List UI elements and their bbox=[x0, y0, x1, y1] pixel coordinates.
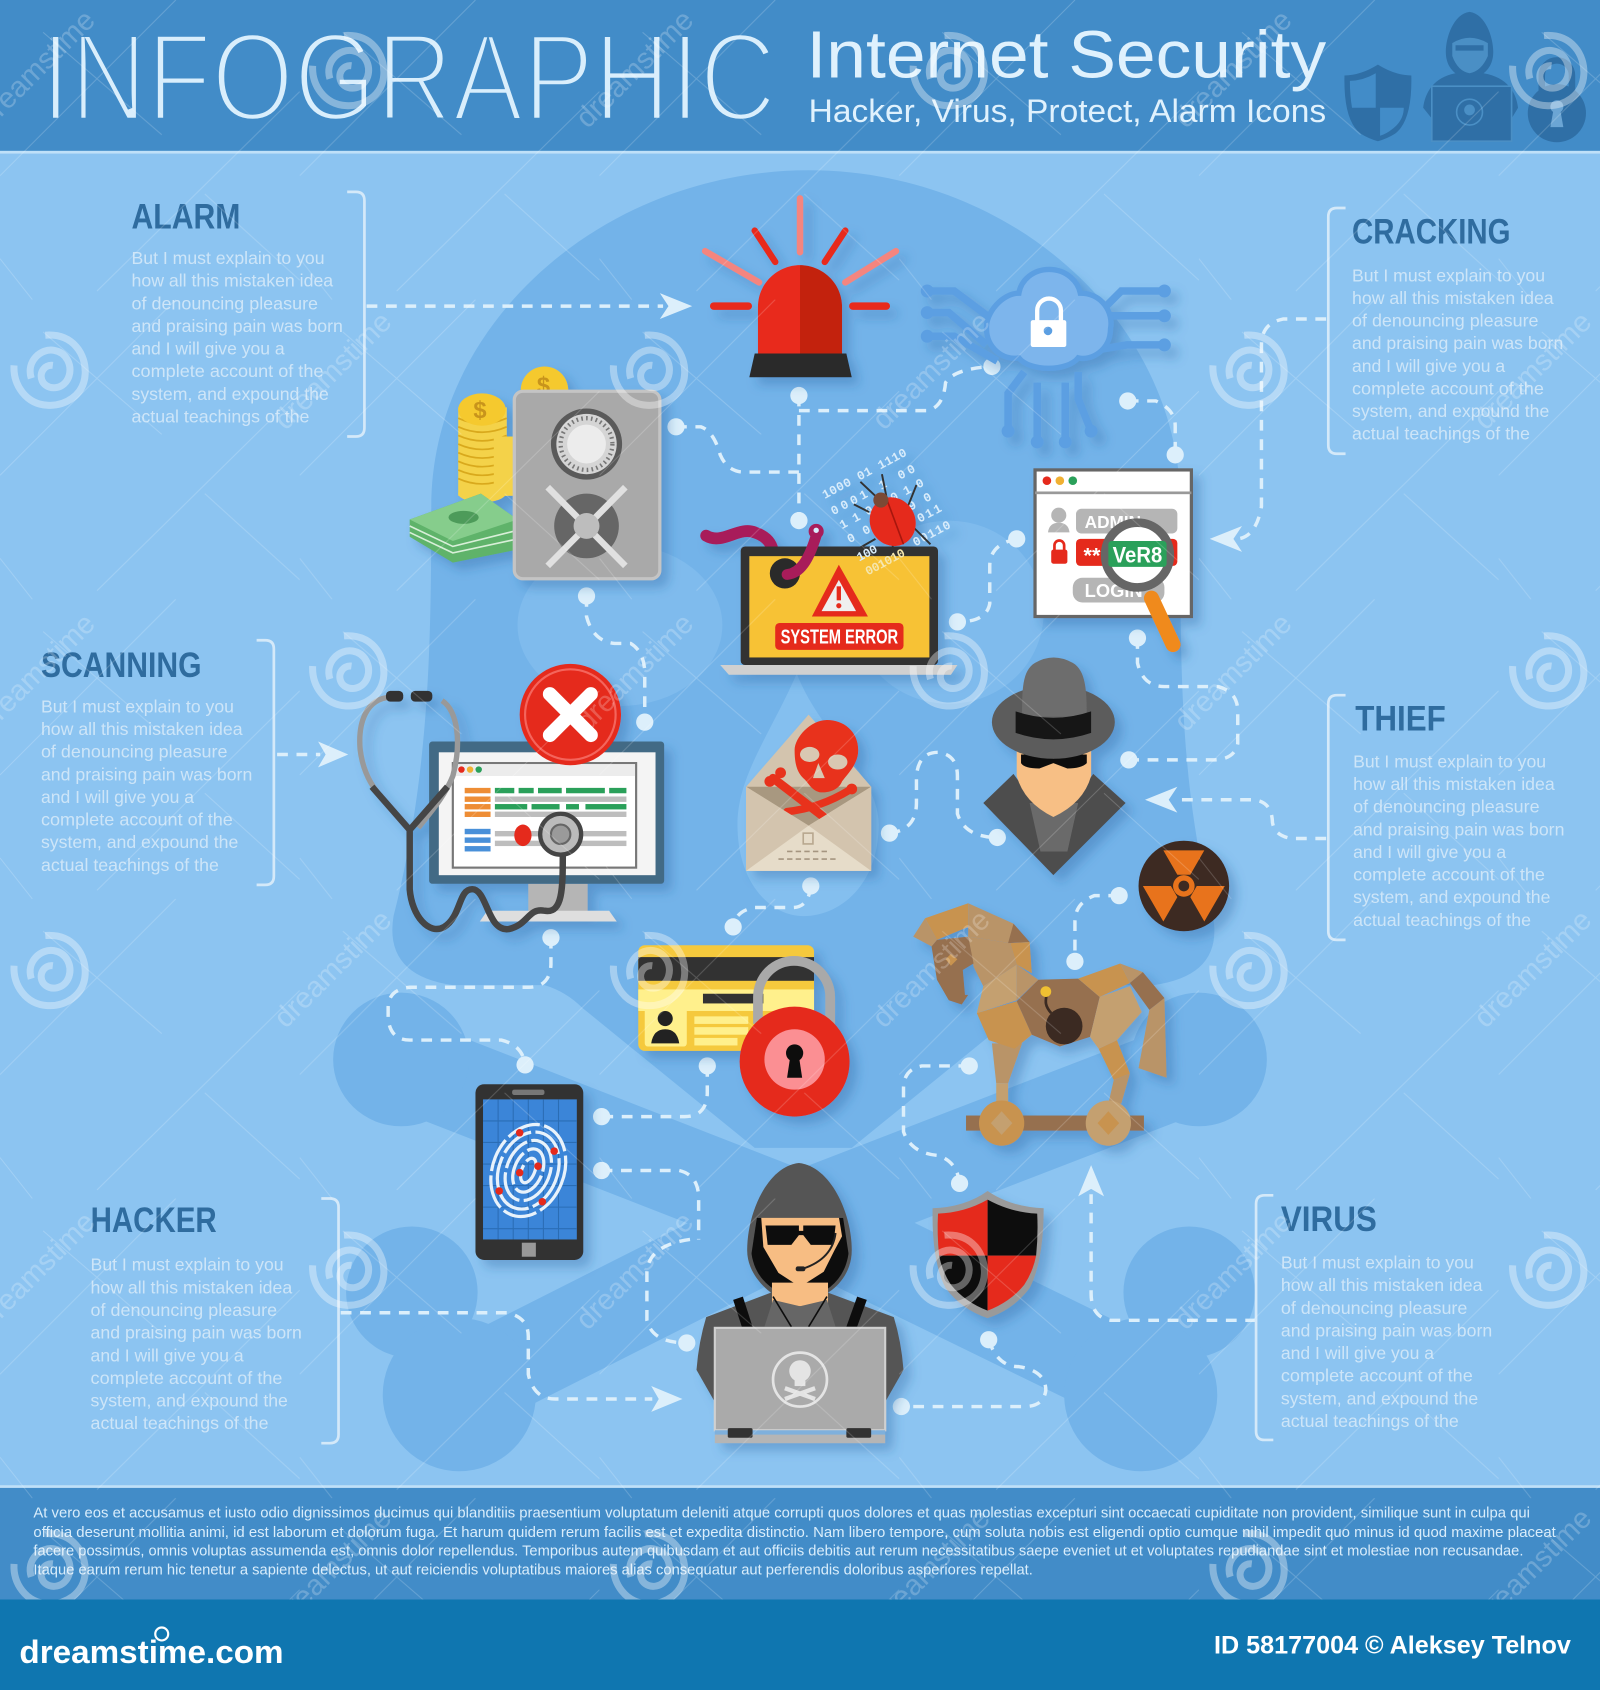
arrow: scanning bbox=[277, 742, 348, 767]
body text: alarm: how all this mistaken idea bbox=[132, 271, 333, 291]
body text: scanning: and I will give you a bbox=[41, 787, 194, 807]
body text: alarm: actual teachings of the bbox=[132, 407, 310, 426]
icon: login window with magnifier: VeR8 bbox=[1113, 543, 1162, 568]
panel: virus bbox=[1256, 1195, 1492, 1440]
subheading: Hacker, Virus, Protect, Alarm Icons bbox=[809, 93, 1326, 129]
icon: laptop system error with worm and bug bbox=[706, 446, 957, 675]
bottom brand bar bbox=[0, 1599, 1600, 1690]
crossbones bbox=[773, 778, 850, 817]
body text: virus: actual teachings of the bbox=[1281, 1411, 1459, 1431]
watermark text: dreamstime bbox=[1168, 608, 1298, 738]
body text: cracking bbox=[1352, 265, 1563, 444]
arrow: hacker bbox=[341, 1313, 682, 1412]
panel: scanning bbox=[41, 640, 274, 885]
watermark text: dreamstime bbox=[268, 306, 398, 436]
body text: virus: and I will give you a bbox=[1281, 1343, 1434, 1363]
body text: alarm: and I will give you a bbox=[132, 339, 285, 359]
body text: cracking: actual teachings of the bbox=[1352, 424, 1530, 444]
watermark text: dreamstime bbox=[866, 1502, 997, 1632]
icon: shield silhouette bbox=[1344, 65, 1411, 141]
body text: cracking: and praising pain was born bbox=[1352, 333, 1563, 353]
heading: virus: VIRUS bbox=[1281, 1199, 1377, 1239]
binary digits: 0001 1 00 bbox=[829, 462, 918, 519]
icon: phone with fingerprint bbox=[475, 1084, 583, 1260]
icon: login window with magnifier: LOGIN bbox=[1085, 580, 1143, 601]
footer paragraph: facere possimus, omnis voluptas assumenda est, omnis dolor repellendus. Temporibus autem quibusdam et aut officiis debitis aut rerum necessitatibus saepe eveniet ut et voluptates repudiandae sint et molestiae non recusandae. bbox=[33, 1543, 1523, 1559]
body text: alarm: of denouncing pleasure bbox=[132, 293, 318, 313]
connector end dots bbox=[516, 358, 1184, 1415]
body text: hacker: how all this mistaken idea bbox=[91, 1277, 292, 1297]
footer paragraph: Itaque earum rerum hic tenetur a sapiente delectus, ut aut reiciendis voluptatibus maiores alias consequatur aut perferendis doloribus asperiores repellat. bbox=[33, 1563, 1033, 1579]
icon: hacker at laptop bbox=[696, 1163, 904, 1443]
icon: red and black shield bbox=[933, 1191, 1044, 1318]
body text: scanning: of denouncing pleasure bbox=[41, 742, 228, 762]
body text: virus: But I must explain to you bbox=[1281, 1253, 1474, 1273]
icon: login window with magnifier: ADMIN bbox=[1085, 512, 1141, 532]
body text: thief: actual teachings of the bbox=[1353, 910, 1531, 930]
heading: Internet Security: Internet Security bbox=[806, 19, 1327, 93]
watermark text: dreamstime bbox=[268, 1502, 398, 1632]
body text: cracking: But I must explain to you bbox=[1352, 265, 1545, 285]
icon: credit card with padlock bbox=[638, 945, 850, 1117]
watermark text: dreamstime bbox=[866, 904, 997, 1034]
icon: hacker silhouette bbox=[1423, 12, 1518, 141]
body text: alarm bbox=[132, 248, 343, 426]
body text: hacker: and praising pain was born bbox=[91, 1323, 302, 1343]
body text: hacker bbox=[91, 1255, 302, 1433]
body text: thief: complete account of the bbox=[1353, 865, 1545, 885]
body text: scanning: complete account of the bbox=[41, 810, 233, 830]
body text: cracking: complete account of the bbox=[1352, 378, 1544, 398]
body text: hacker: actual teachings of the bbox=[91, 1413, 269, 1433]
watermark text: dreamstime bbox=[570, 608, 700, 738]
body text: thief: But I must explain to you bbox=[1353, 751, 1546, 771]
binary digits: 00 ^90 bbox=[845, 490, 934, 547]
binary digits: 1000 01 1110 bbox=[820, 446, 909, 503]
panel: thief bbox=[1328, 695, 1564, 940]
icon: monitor scanning with stethoscope bbox=[360, 664, 664, 929]
body text: scanning: and praising pain was born bbox=[41, 764, 252, 784]
arrow: thief bbox=[1145, 787, 1326, 839]
icon: cloud lock with circuits bbox=[921, 269, 1171, 448]
body text: alarm: and praising pain was born bbox=[132, 316, 343, 336]
watermark text: dreamstime bbox=[268, 904, 398, 1034]
body text: scanning: system, and expound the bbox=[41, 832, 238, 852]
body text: thief: of denouncing pleasure bbox=[1353, 797, 1540, 817]
body text: hacker: and I will give you a bbox=[91, 1345, 244, 1365]
icon: laptop system error with worm and bug: 001010 bbox=[863, 546, 908, 579]
body text: cracking: how all this mistaken idea bbox=[1352, 288, 1554, 308]
body text: cracking: system, and expound the bbox=[1352, 401, 1549, 421]
body text: cracking: of denouncing pleasure bbox=[1352, 311, 1539, 331]
logo text: dreamstime.com bbox=[19, 1634, 284, 1670]
icon: thief in hat bbox=[983, 657, 1126, 875]
body text: thief: how all this mistaken idea bbox=[1353, 774, 1555, 794]
binary digits: 110 010 bbox=[837, 476, 927, 533]
heading: scanning: SCANNING bbox=[41, 645, 202, 685]
skull and crossbones backdrop bbox=[333, 170, 1267, 1471]
icon: alarm siren bbox=[705, 198, 896, 377]
body text: hacker: But I must explain to you bbox=[91, 1255, 284, 1275]
icon: safe with coins and cash bbox=[410, 366, 660, 579]
body text: thief: and I will give you a bbox=[1353, 842, 1506, 862]
icon: trojan horse bbox=[913, 903, 1167, 1146]
body text: thief: and praising pain was born bbox=[1353, 819, 1564, 839]
heading: alarm: ALARM bbox=[132, 197, 240, 236]
heading: thief: THIEF bbox=[1355, 699, 1446, 739]
image id and credit: ID 58177004 © Aleksey Telnov bbox=[1214, 1632, 1571, 1659]
icon: login window with magnifier: ** bbox=[1084, 543, 1101, 568]
icon: login window with magnifier bbox=[1035, 470, 1191, 645]
body text: cracking: and I will give you a bbox=[1352, 356, 1505, 376]
connector paths bbox=[388, 358, 1238, 1415]
watermark text: dreamstime bbox=[570, 1206, 700, 1336]
logo spiral bbox=[155, 1627, 168, 1640]
body text: virus: system, and expound the bbox=[1281, 1388, 1478, 1408]
footer paragraph: At vero eos et accusamus et iusto odio dignissimos ducimus qui blanditiis praesentium voluptatum deleniti atque corrupti quos dolores et quas molestias excepturi sint occaecati cupiditate non provident, similique sunt in culpa qui bbox=[33, 1506, 1530, 1522]
body text: virus: and praising pain was born bbox=[1281, 1320, 1492, 1340]
arrow: alarm bbox=[367, 293, 692, 319]
body text: hacker: of denouncing pleasure bbox=[91, 1300, 277, 1320]
body text: thief: system, and expound the bbox=[1353, 887, 1551, 907]
watermark text: dreamstime bbox=[1468, 904, 1598, 1034]
footer text band bbox=[0, 1485, 1600, 1599]
body text: scanning: how all this mistaken idea bbox=[41, 719, 243, 739]
arrow: virus bbox=[1078, 1165, 1256, 1320]
body text: alarm: system, and expound the bbox=[132, 384, 329, 404]
binary digits bbox=[820, 446, 953, 550]
binary digits: 00110 bbox=[911, 518, 953, 550]
body text: alarm: But I must explain to you bbox=[132, 248, 325, 268]
body text: virus: of denouncing pleasure bbox=[1281, 1298, 1467, 1318]
watermark text: dreamstime bbox=[1168, 4, 1298, 134]
body text: scanning bbox=[41, 696, 252, 875]
body text: thief bbox=[1353, 751, 1564, 930]
body text: hacker: system, and expound the bbox=[91, 1391, 288, 1411]
body text: hacker: complete account of the bbox=[91, 1368, 283, 1388]
panel: alarm bbox=[132, 192, 364, 437]
icon: padlock silhouette bbox=[1528, 60, 1586, 142]
body text: virus: how all this mistaken idea bbox=[1281, 1275, 1483, 1295]
watermark text: dreamstime bbox=[1468, 306, 1598, 436]
body text: virus: complete account of the bbox=[1281, 1366, 1473, 1386]
icon: laptop system error with worm and bug: SYSTEM ERROR bbox=[781, 625, 898, 648]
watermark text: dreamstime bbox=[1468, 1502, 1598, 1632]
watermark text: dreamstime bbox=[570, 4, 700, 134]
panel: cracking bbox=[1328, 208, 1563, 454]
body text: alarm: complete account of the bbox=[132, 361, 324, 381]
panel: hacker bbox=[91, 1199, 339, 1443]
icon: laptop system error with worm and bug: 100 bbox=[855, 543, 880, 565]
footer paragraph bbox=[33, 1506, 1556, 1579]
arrow: cracking bbox=[1210, 319, 1326, 552]
heading: cracking: CRACKING bbox=[1352, 212, 1511, 252]
title: INFOGRAPHIC: INFOGRAPHIC bbox=[41, 9, 776, 148]
body text: scanning: actual teachings of the bbox=[41, 855, 219, 875]
watermark text: dreamstime bbox=[1168, 1206, 1298, 1336]
icon: radiation symbol bbox=[1139, 841, 1229, 931]
heading: hacker: HACKER bbox=[91, 1200, 217, 1240]
footer paragraph: officia deserunt mollitia animi, id est laborum et dolorum fuga. Et harum quidem rerum facilis est et expedita distinctio. Nam libero tempore, cum soluta nobis est eligendi optio cumque nihil impedit quo minus id quod maxime placeat bbox=[33, 1525, 1556, 1541]
icon: safe with coins and cash: $ bbox=[473, 398, 487, 424]
watermark text: dreamstime bbox=[866, 306, 997, 436]
header band bbox=[0, 0, 1600, 154]
body text: virus bbox=[1281, 1253, 1492, 1431]
binary digits: 011 bbox=[915, 502, 944, 526]
icon: skull envelope bbox=[746, 715, 871, 871]
body text: scanning: But I must explain to you bbox=[41, 696, 234, 716]
icon: safe with coins and cash: $ bbox=[537, 373, 550, 399]
